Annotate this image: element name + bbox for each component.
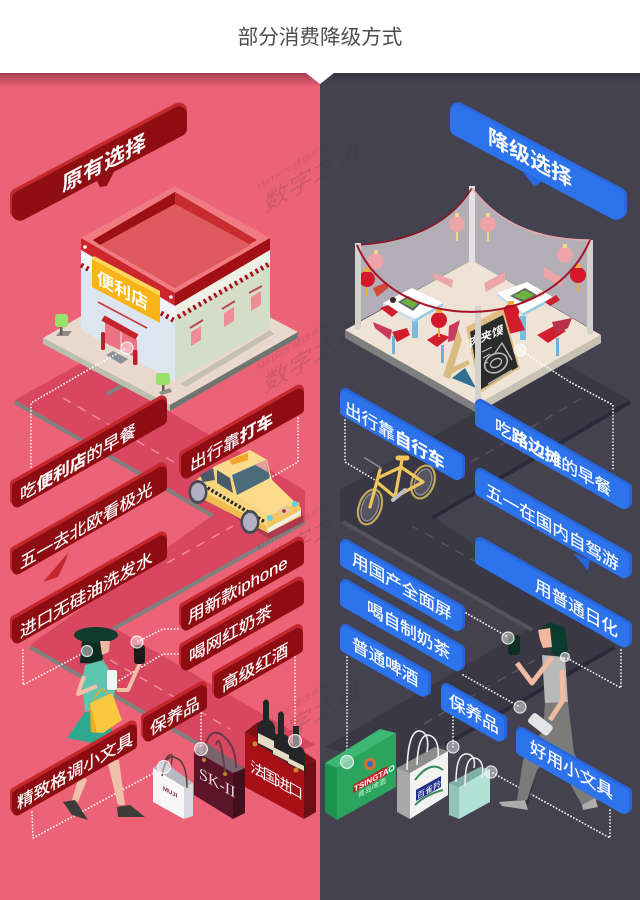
box: Tsingtao beer: 青岛啤酒 (358, 775, 386, 800)
watermark: MATRIX 精选原创 (257, 679, 329, 734)
illustration: street food stall (345, 186, 601, 413)
label: taxi (184, 390, 299, 479)
illustration: convenience store (43, 186, 298, 411)
label: convenience store breakfast: 吃便利店的早餐 (20, 420, 136, 505)
bag: mint (449, 754, 490, 819)
label: taxi: 出行靠打车 (190, 409, 273, 475)
shop sign (92, 256, 160, 323)
label: bicycle: 出行靠自行车 (345, 397, 445, 473)
lanterns (359, 213, 586, 337)
wine bottles (257, 700, 305, 772)
label: domestic road trip: 五一在国内自驾游 (486, 480, 619, 575)
box: Tsingtao beer (325, 729, 396, 820)
bag: MUJI white (153, 755, 193, 819)
label: homemade milk tea: 喝自制奶茶 (367, 598, 450, 663)
bag: Pechoin: 百雀羚 (417, 777, 441, 801)
panel: downgrade choice background (320, 73, 640, 900)
watermark (257, 119, 361, 763)
label: homemade milk tea (345, 584, 460, 669)
label: useful stationery (521, 732, 627, 811)
label: convenience store breakfast (15, 400, 162, 508)
label: aurora trip: 五一去北欧看极光 (20, 479, 153, 573)
banner: original choice (18, 110, 179, 233)
label: stationery: 精致格调小文具 (17, 729, 133, 814)
hotspots (82, 342, 570, 778)
label: milk tea (184, 582, 299, 670)
banner: downgrade choice (458, 109, 619, 232)
illustration: taxi (188, 450, 304, 539)
watermark: MATRIX 精选原创 (257, 139, 329, 194)
label: red wine (217, 629, 298, 699)
bag: SK-II: SK-II (199, 764, 236, 802)
label: milk tea: 喝网红奶茶 (189, 601, 272, 667)
label: daily chemical (480, 542, 627, 646)
dotted leader lines: left (23, 348, 298, 838)
tables and chairs (373, 267, 572, 363)
label: new iphone: 用新款iphone (188, 552, 288, 628)
title band (0, 0, 640, 84)
bag: SK-II (194, 733, 245, 819)
icon: A-frame menu board: 肉夹馍 (469, 322, 504, 350)
watermark: 数字之道 (265, 673, 361, 759)
box: Tsingtao beer: TSINGTAO (354, 762, 395, 794)
bag: MUJI white: MUJI (163, 785, 178, 800)
watermark: MATRIX 精选原创 (257, 499, 329, 554)
watermark: 数字之道 (265, 133, 361, 219)
label: silicone free shampoo: 进口无硅油洗发水 (20, 548, 153, 642)
label: skincare: 保养品 (449, 691, 499, 738)
label: street stall breakfast: 吃路边摊的早餐 (495, 416, 611, 500)
label: street stall breakfast (480, 404, 627, 509)
bag: Pechoin (397, 731, 448, 819)
icon: A-frame menu board (443, 308, 520, 393)
label: red wine: 高级红酒 (222, 640, 288, 696)
watermark: 数字之道 (265, 493, 361, 579)
label: useful stationery: 好用小文具 (530, 737, 613, 803)
dotted leader lines: right (345, 350, 621, 838)
panel: original choice background (0, 73, 320, 900)
road: right panel (325, 362, 630, 770)
label: ordinary beer: 普通啤酒 (352, 634, 418, 690)
figure: woman shopper left (63, 627, 145, 820)
label: skincare: 保养品 (150, 693, 200, 740)
top shadow (0, 73, 640, 87)
shop sign: 便利店 (97, 268, 148, 314)
title band: 部分消费降级方式 (238, 26, 402, 49)
bag: French wine box: 法国进口 (250, 758, 303, 804)
label: domestic phone: 用国产全面屏 (352, 549, 451, 624)
figure: woman shopper right (499, 622, 598, 810)
banner: downgrade choice: 降级选择 (488, 124, 572, 193)
bag: French wine box (245, 700, 316, 819)
watermark: 数字之道 (265, 313, 361, 399)
road: left panel (15, 362, 316, 770)
label: daily chemical: 用普通日化 (535, 575, 618, 641)
watermark: MATRIX 精选原创 (257, 319, 329, 374)
illustration: bicycle (354, 458, 439, 528)
icon: small trees (55, 314, 172, 395)
banner: original choice: 原有选择 (62, 129, 146, 197)
